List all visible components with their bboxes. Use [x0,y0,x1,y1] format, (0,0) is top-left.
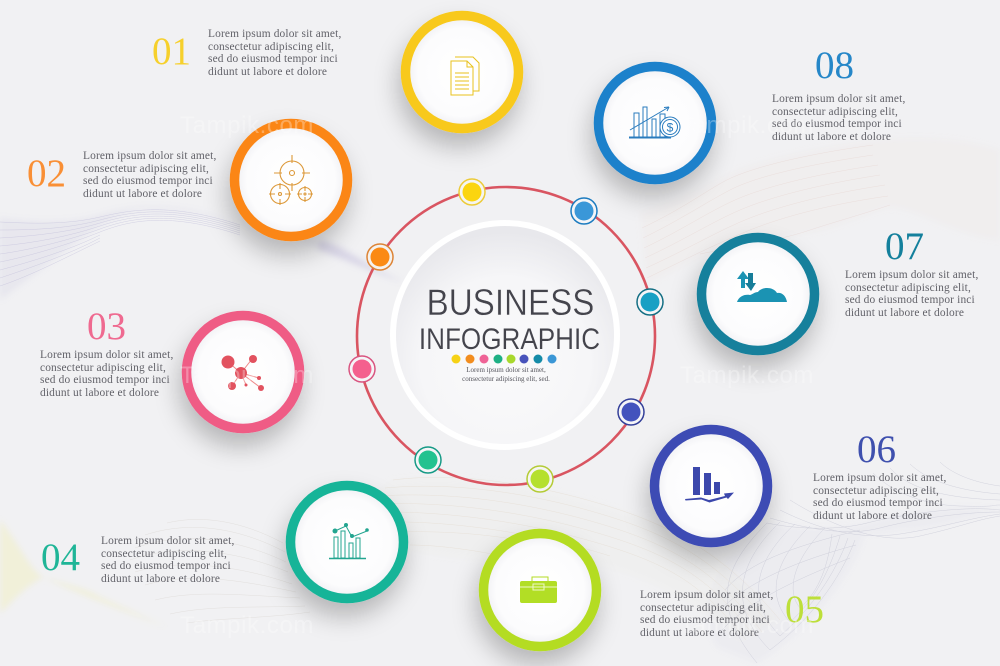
text 04: didunt ut labore et dolore [101,573,220,585]
circle 03 pink [186,316,300,428]
text 02: Lorem ipsum dolor sit amet, [83,150,216,162]
text 06: didunt ut labore et dolore [813,510,932,522]
title line 1: BUSINESS [427,281,594,323]
dollar sign: $ [667,120,674,134]
text 02: sed do eiusmod tempor inci [83,175,213,187]
title [419,281,600,356]
text 08: didunt ut labore et dolore [772,131,891,143]
number 04: 04 [41,536,80,579]
wave band: upper right [642,145,890,278]
text 04: sed do eiusmod tempor inci [101,560,231,572]
text 07 [845,269,978,319]
text 05 [640,589,773,639]
text 07: Lorem ipsum dolor sit amet, [845,269,978,281]
text 04: consectetur adipiscing elit, [101,548,227,560]
number 02: 02 [27,152,66,195]
text 03: sed do eiusmod tempor inci [40,374,170,386]
text 03: Lorem ipsum dolor sit amet, [40,349,173,361]
text 04 [101,535,234,585]
text 02: didunt ut labore et dolore [83,188,202,200]
circle 02 orange [234,124,348,236]
text 05: didunt ut labore et dolore [640,627,759,639]
node: pink [349,356,375,382]
text 07: sed do eiusmod tempor inci [845,294,975,306]
text 06: consectetur adipiscing elit, [813,485,939,497]
number 08: 08 [815,44,854,87]
center disc [393,223,617,447]
number 07: 07 [885,225,924,268]
node: blue [571,198,597,224]
number 01: 01 [152,30,191,73]
icon: briefcase [520,577,557,603]
watermark: Tampik.com [680,612,814,639]
text 01: didunt ut labore et dolore [208,66,327,78]
icon: growth chart [629,107,680,138]
text 08 [772,93,905,143]
node: green [415,447,441,473]
node: orange [367,244,393,270]
text 08: consectetur adipiscing elit, [772,106,898,118]
text 08: Lorem ipsum dolor sit amet, [772,93,905,105]
text 06: sed do eiusmod tempor inci [813,497,943,509]
wave band: lower middle [368,477,780,640]
node: yellow [459,179,485,205]
icon: targets [269,155,313,205]
text 08: sed do eiusmod tempor inci [772,118,902,130]
text 06: Lorem ipsum dolor sit amet, [813,472,946,484]
number 03: 03 [87,305,126,348]
watermark: Tampik.com [180,362,314,389]
watermark: Tampik.com [680,112,814,139]
text 07: didunt ut labore et dolore [845,307,964,319]
icon: molecule [222,355,264,391]
center ring [357,187,655,485]
text 01 [208,28,341,78]
center caption [462,366,550,382]
title line 2: INFOGRAPHIC [419,323,600,356]
text 01: Lorem ipsum dolor sit amet, [208,28,341,40]
text 06 [813,472,946,522]
text 03: didunt ut labore et dolore [40,387,159,399]
circle 01 yellow [406,16,518,128]
number 05: 05 [785,588,824,631]
text 03: consectetur adipiscing elit, [40,362,166,374]
text 04: Lorem ipsum dolor sit amet, [101,535,234,547]
watermark: Tampik.com [180,112,314,139]
band fills [0,138,1000,663]
text 05: consectetur adipiscing elit, [640,602,766,614]
text 05: sed do eiusmod tempor inci [640,614,770,626]
center dots [452,354,556,364]
circle 07 teal [702,238,814,350]
node: teal [637,289,663,315]
text 01: consectetur adipiscing elit, [208,41,334,53]
wave band: left purple [0,210,240,286]
icon: documents [451,57,479,95]
watermark: Tampik.com [180,612,314,639]
center caption: Lorem ipsum dolor sit amet, [466,366,546,374]
circle 06 indigo [654,430,768,542]
node: indigo [618,399,644,425]
text 07: consectetur adipiscing elit, [845,282,971,294]
text 05: Lorem ipsum dolor sit amet, [640,589,773,601]
circle 05 lime [484,534,596,646]
icon: bars and arrow [685,467,734,502]
watermark: Tampik.com [680,362,814,389]
circle 04 green [290,486,404,598]
node: lime [527,466,553,492]
icon: bars and line chart [329,523,369,558]
text 01: sed do eiusmod tempor inci [208,53,338,65]
wave band: lower right [720,462,1000,663]
circle 08 blue [598,66,712,180]
text 02: consectetur adipiscing elit, [83,163,209,175]
number 06: 06 [857,428,896,471]
icon: cloud and arrows [737,271,787,302]
center caption: consectetur adipiscing elit, sed. [462,374,550,382]
text 03 [40,349,173,399]
wave band: lower left lens [130,519,310,623]
text 02 [83,150,216,200]
